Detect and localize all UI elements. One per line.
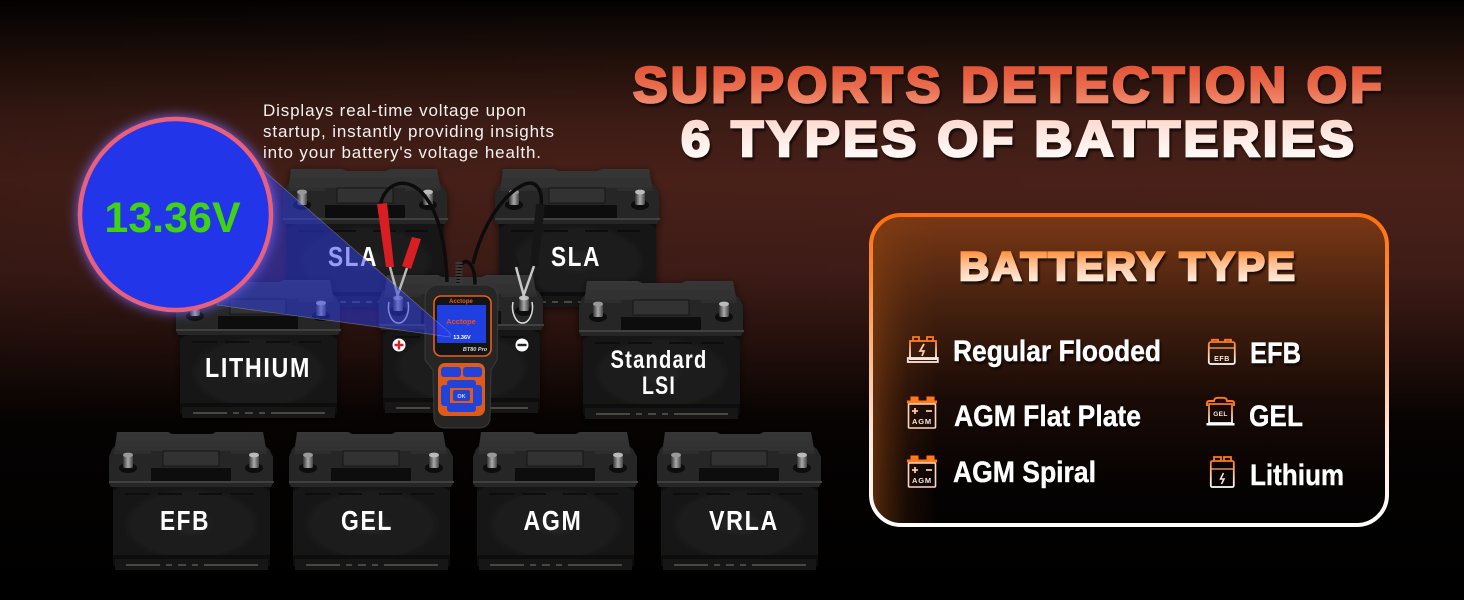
red clamp: [377, 203, 421, 323]
battery: VRLA: VRLA: [709, 505, 779, 536]
battery: centre under test: [379, 275, 544, 413]
keypad: OK: [457, 394, 466, 400]
tester device: [425, 285, 498, 428]
icon: regular flooded: [908, 337, 938, 362]
title line 1: SUPPORTS DETECTION OF: [633, 57, 1385, 113]
caption text: Displays real-time voltage upon: [263, 101, 526, 120]
battery: GEL: [289, 432, 454, 570]
batteries group: [109, 169, 822, 570]
caption text: startup, instantly providing insights: [263, 122, 554, 141]
screen: Acctope: [446, 317, 476, 326]
caption text: [263, 101, 554, 162]
label: GEL: GEL: [1249, 400, 1303, 433]
screen: [437, 305, 486, 343]
plus terminal mark: [392, 338, 406, 352]
battery: Standard LSI: [579, 281, 744, 419]
screen: 13.36V: [453, 335, 471, 341]
cables: [380, 183, 541, 286]
label: regular flooded: Regular Flooded: [953, 335, 1161, 368]
battery: SLA right: [495, 169, 660, 307]
label: lithium: Lithium: [1250, 459, 1344, 492]
device model: BT80 Pro: [463, 347, 488, 353]
icon: GEL: [1206, 398, 1234, 426]
panel: battery type: [871, 215, 1387, 525]
label: AGM spiral: AGM Spiral: [953, 456, 1096, 489]
battery: LITHIUM: [176, 280, 341, 418]
icon: GEL: GEL: [1213, 411, 1228, 418]
voltage callout circle: [80, 119, 271, 310]
battery: EFB: [109, 432, 274, 570]
battery: Standard LSI: Standard: [610, 346, 708, 374]
battery: AGM: AGM: [524, 505, 582, 536]
title line 2: 6 TYPES OF BATTERIES: [681, 111, 1357, 167]
battery: Standard LSI: LSI: [642, 372, 676, 400]
device brand: Acctope: [449, 299, 473, 305]
magnifier beam: [217, 170, 450, 337]
battery: SLA left: SLA: [328, 241, 378, 272]
panel heading: BATTERY TYPE: [959, 245, 1297, 289]
icon: EFB: [1209, 340, 1235, 364]
keypad: [438, 363, 485, 416]
black clamp: [501, 204, 545, 323]
voltage reading: 13.36V: [104, 194, 241, 242]
battery: EFB: EFB: [160, 505, 210, 536]
label: EFB: EFB: [1250, 337, 1301, 370]
battery: AGM: [473, 432, 638, 570]
label: AGM flat plate: AGM Flat Plate: [954, 400, 1141, 433]
panel frame: [871, 215, 1387, 525]
icon: AGM spiral: [907, 456, 937, 487]
caption text: into your battery's voltage health.: [263, 143, 541, 162]
icon: EFB: EFB: [1214, 356, 1230, 363]
icon: lithium: [1211, 457, 1234, 487]
icon: AGM flat plate: [907, 397, 937, 428]
battery: GEL: GEL: [341, 505, 393, 536]
title: [633, 57, 1385, 167]
device body: [425, 285, 498, 428]
battery: VRLA: [657, 432, 822, 570]
minus terminal mark: [516, 338, 528, 352]
battery: SLA left: [283, 169, 448, 307]
battery: LITHIUM: LITHIUM: [205, 352, 311, 383]
battery: SLA right: SLA: [551, 241, 601, 272]
screen frame: [434, 296, 491, 356]
